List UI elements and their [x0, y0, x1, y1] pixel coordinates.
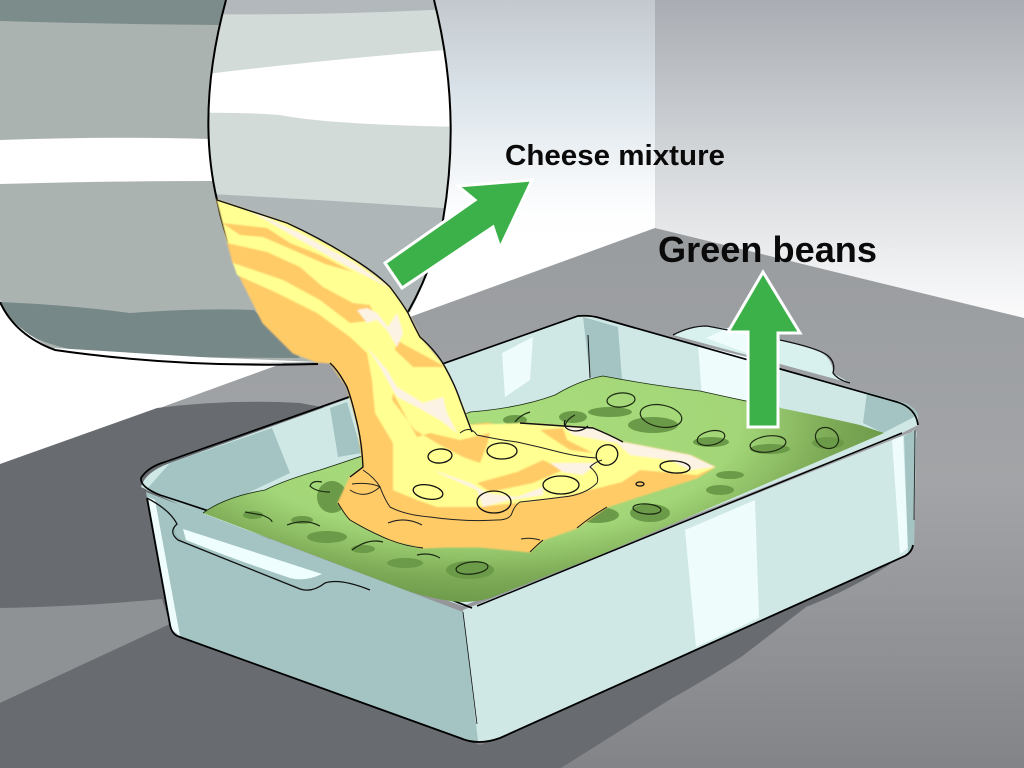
dish back inner wall	[141, 316, 918, 606]
pot opening interior	[207, 0, 452, 356]
label: Green beans: Green beans	[658, 229, 877, 270]
beans on cheese	[412, 420, 690, 513]
cheese mixture pour	[217, 200, 715, 552]
pot body	[0, 0, 318, 365]
dish outlines	[141, 316, 918, 608]
left handle	[183, 529, 322, 579]
bean shadows	[243, 407, 844, 579]
cheese white highlights	[245, 208, 715, 507]
dish front-right wall	[463, 430, 916, 742]
arrow: cheese mixture	[385, 180, 532, 288]
far handle	[673, 326, 850, 383]
bean outlines	[245, 392, 842, 576]
dish front-left wall	[146, 492, 480, 742]
green beans layer	[203, 376, 884, 602]
cheese yellow	[217, 200, 715, 507]
cheese base orange	[217, 200, 715, 552]
cheese fills	[217, 200, 715, 552]
glass baking dish	[141, 316, 918, 742]
label: Cheese mixture: Cheese mixture	[505, 140, 725, 172]
arrow: green beans	[728, 272, 800, 427]
cheese orange streaks	[222, 223, 697, 492]
cheese outlines	[217, 200, 623, 552]
